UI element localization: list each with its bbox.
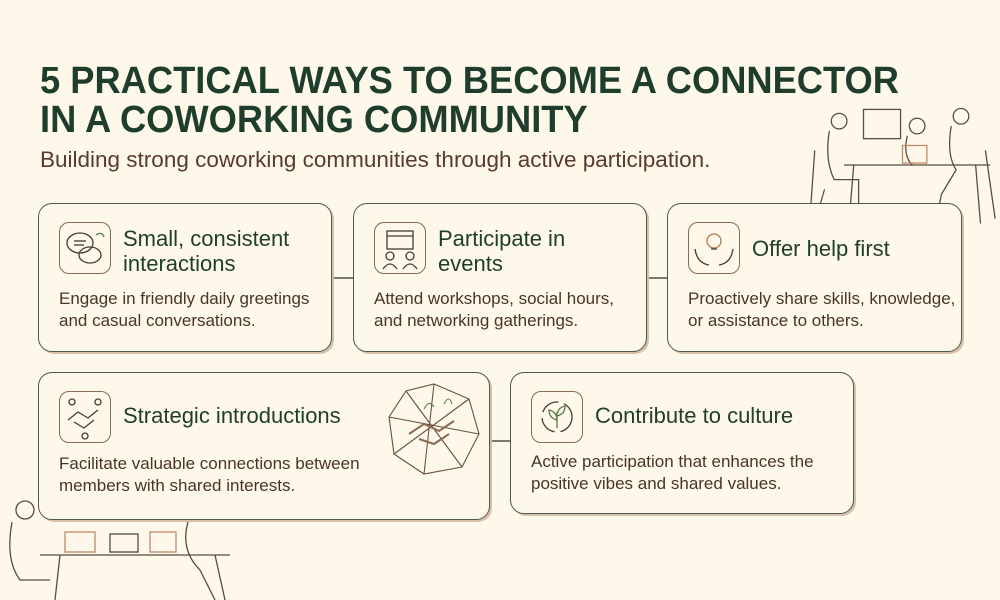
title: IN A COWORKING COMMUNITY — [40, 99, 588, 141]
card 1: small interactions — [38, 203, 332, 352]
card 5: culture: positive vibes and shared values. — [531, 474, 781, 493]
card 3: offer help: Proactively share skills, knowledge, — [688, 289, 955, 308]
card 2: events: events — [438, 251, 503, 276]
connector lines — [330, 277, 355, 278]
card 3: offer help — [667, 203, 962, 352]
card 1: small interactions: Small, consistent — [123, 226, 289, 251]
card 4: strategic introductions: Strategic introductions — [123, 403, 341, 428]
card 5: culture — [510, 372, 854, 514]
illustration: network handshake — [388, 383, 480, 475]
card 4: strategic introductions — [38, 372, 490, 520]
subtitle: Building strong coworking communities through active participation. — [40, 147, 710, 172]
card 1: small interactions: and casual conversations. — [59, 311, 256, 330]
card 1: small interactions: Engage in friendly daily greetings — [59, 289, 309, 308]
icon: handshake — [59, 391, 111, 443]
card 4: strategic introductions: Facilitate valuable connections between — [59, 454, 360, 473]
icon: plant cycle — [531, 391, 583, 443]
illustration: coworkers top right — [810, 108, 996, 224]
card 2: events: and networking gatherings. — [374, 311, 578, 330]
card 3: offer help: or assistance to others. — [688, 311, 864, 330]
card 4: strategic introductions: members with shared interests. — [59, 476, 295, 495]
card 5: culture: Contribute to culture — [595, 403, 793, 428]
icon: calendar people — [374, 222, 426, 274]
card 1: small interactions: interactions — [123, 251, 236, 276]
card 2: events: Participate in — [438, 226, 565, 251]
card 5: culture: Active participation that enhances the — [531, 452, 814, 471]
title — [40, 60, 899, 141]
icon: hands with lightbulb — [688, 222, 740, 274]
card 2: events: Attend workshops, social hours, — [374, 289, 614, 308]
card 3: offer help: Offer help first — [752, 236, 890, 261]
title: 5 PRACTICAL WAYS TO BECOME A CONNECTOR — [40, 60, 899, 102]
card 2: events — [353, 203, 647, 352]
icon: chat bubbles — [59, 222, 111, 274]
illustration: coworkers bottom left — [9, 500, 230, 600]
